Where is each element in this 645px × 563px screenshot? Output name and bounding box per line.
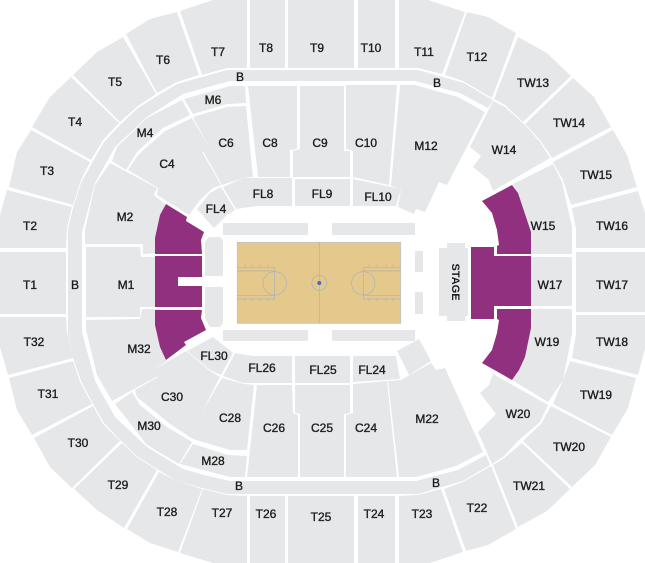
section TW17: TW17	[596, 278, 628, 292]
section T7	[180, 0, 247, 75]
section T24: T24	[364, 507, 385, 521]
section M1	[86, 247, 178, 317]
section M30: M30	[137, 419, 161, 433]
section T2	[0, 190, 72, 248]
section T23: T23	[412, 507, 433, 521]
section TW13	[494, 37, 571, 122]
section T3	[9, 130, 90, 205]
section TW21: TW21	[513, 479, 545, 493]
section FL26	[223, 353, 292, 383]
section W14	[470, 101, 550, 191]
section FL30: FL30	[200, 349, 228, 363]
section M12	[391, 85, 485, 214]
section TW16	[572, 191, 645, 248]
section FL10	[353, 179, 401, 206]
section W15: W15	[531, 219, 556, 233]
section C30	[135, 351, 220, 439]
stage	[439, 243, 468, 321]
section C26	[247, 385, 298, 477]
section C6	[193, 106, 253, 185]
concourse ring B: B	[71, 278, 79, 292]
section FL9	[295, 179, 350, 206]
section C4: C4	[159, 157, 175, 171]
section T1: T1	[23, 278, 37, 292]
section T9	[288, 0, 354, 68]
section C4	[128, 118, 221, 215]
section T6	[126, 12, 199, 93]
section T32: T32	[24, 335, 45, 349]
highlighted sections right	[471, 185, 531, 380]
section T32	[0, 317, 73, 375]
section FL9: FL9	[312, 187, 333, 201]
section C6: C6	[218, 136, 234, 150]
section W20	[478, 374, 548, 464]
section C10	[346, 85, 397, 185]
section TW17	[576, 252, 645, 312]
floor bar top left	[223, 223, 308, 235]
section M6: M6	[205, 93, 222, 107]
section TW20: TW20	[553, 440, 585, 454]
concourse ring B	[68, 70, 493, 494]
section T4	[32, 77, 119, 160]
section C25	[295, 385, 350, 477]
concourse ring B: B	[236, 70, 244, 84]
section T7: T7	[211, 45, 225, 59]
section FL26: FL26	[248, 361, 276, 375]
concourse ring B: B	[432, 476, 440, 490]
section M28	[180, 444, 247, 477]
section T9: T9	[310, 41, 324, 55]
section FL4: FL4	[206, 202, 227, 216]
section T8	[250, 0, 285, 68]
section M1: M1	[118, 278, 135, 292]
section T5	[73, 37, 156, 122]
section T1	[0, 252, 66, 314]
section FL25: FL25	[309, 363, 337, 377]
floor bar top right	[332, 223, 415, 235]
section T11	[399, 0, 465, 74]
section T29: T29	[108, 478, 129, 492]
section T23	[399, 489, 463, 563]
basketball court	[237, 242, 401, 323]
section W15	[513, 164, 572, 254]
floor block upper right	[415, 251, 423, 272]
floor block upper left	[205, 237, 223, 276]
section T25: T25	[311, 510, 332, 524]
section T25	[288, 496, 354, 563]
section T28: T28	[157, 505, 178, 519]
section FL30	[187, 337, 233, 375]
section TW21	[493, 443, 570, 527]
section W19: W19	[535, 335, 560, 349]
section T4: T4	[68, 115, 82, 129]
section C8: C8	[262, 136, 278, 150]
section TW18	[572, 315, 645, 375]
section FL24	[353, 356, 400, 382]
section T11: T11	[414, 45, 434, 59]
section C9: C9	[312, 136, 328, 150]
section W14: W14	[492, 143, 517, 157]
section TW16: TW16	[596, 219, 628, 233]
section T22: T22	[467, 501, 488, 515]
section C24: C24	[355, 421, 377, 435]
section FL10: FL10	[364, 190, 392, 204]
section M2	[85, 163, 165, 254]
section C26: C26	[263, 421, 285, 435]
section M32	[86, 309, 167, 401]
section M22	[388, 363, 483, 477]
section TW18: TW18	[596, 335, 628, 349]
floor block lower right	[415, 292, 423, 314]
section T26: T26	[256, 507, 277, 521]
section TW15	[553, 130, 637, 205]
section M12: M12	[414, 139, 438, 153]
section TW20	[523, 406, 611, 487]
section T30: T30	[68, 436, 89, 450]
section TW15: TW15	[580, 168, 612, 182]
section TW13: TW13	[517, 76, 549, 90]
section FL8	[223, 178, 292, 209]
section T30	[34, 406, 120, 488]
floor bar bottom left	[223, 330, 308, 341]
section M30	[115, 392, 192, 464]
section M32: M32	[127, 342, 151, 356]
section M2: M2	[117, 210, 134, 224]
section TW14	[525, 78, 611, 158]
section W17	[530, 257, 572, 306]
section M28: M28	[201, 454, 225, 468]
section T31	[9, 361, 92, 435]
section M4: M4	[137, 126, 154, 140]
section W20: W20	[506, 407, 531, 421]
section T27	[180, 489, 247, 563]
section C30: C30	[161, 390, 183, 404]
section FL8: FL8	[253, 187, 274, 201]
section C24	[346, 381, 397, 477]
section TW19: TW19	[580, 388, 612, 402]
section T2: T2	[23, 219, 37, 233]
floor block lower left	[205, 287, 223, 327]
section C28: C28	[219, 411, 241, 425]
section T10	[358, 0, 395, 68]
section FL4	[197, 187, 235, 228]
stage: STAGE	[449, 263, 461, 301]
section M4	[112, 100, 190, 170]
section TW14: TW14	[553, 116, 585, 130]
section T22	[444, 466, 516, 551]
section T26	[250, 496, 285, 563]
floor bar bottom right	[332, 330, 415, 341]
section TW19	[553, 361, 636, 435]
highlighted sections left	[155, 204, 206, 360]
section T12: T12	[467, 50, 488, 64]
section T5: T5	[108, 75, 122, 89]
section T10: T10	[361, 41, 382, 55]
section C9	[293, 86, 350, 177]
small section beside M22	[397, 339, 431, 375]
section C10: C10	[355, 136, 377, 150]
section T12	[445, 12, 516, 98]
section T6: T6	[156, 53, 170, 67]
section T24	[358, 496, 395, 563]
section FL24: FL24	[358, 363, 386, 377]
section M22: M22	[415, 412, 439, 426]
section FL25	[295, 356, 350, 383]
concourse ring B: B	[235, 479, 243, 493]
section T27: T27	[212, 506, 233, 520]
section T8: T8	[259, 41, 273, 55]
section W19	[512, 309, 572, 402]
section C25: C25	[311, 421, 333, 435]
section M6	[184, 86, 246, 114]
section T28	[127, 472, 202, 552]
section T31: T31	[38, 387, 59, 401]
section W17: W17	[538, 278, 563, 292]
section T3: T3	[40, 164, 54, 178]
concourse ring B: B	[433, 76, 441, 90]
section T29	[74, 443, 157, 528]
section C28	[193, 378, 254, 450]
section C8	[248, 86, 297, 177]
